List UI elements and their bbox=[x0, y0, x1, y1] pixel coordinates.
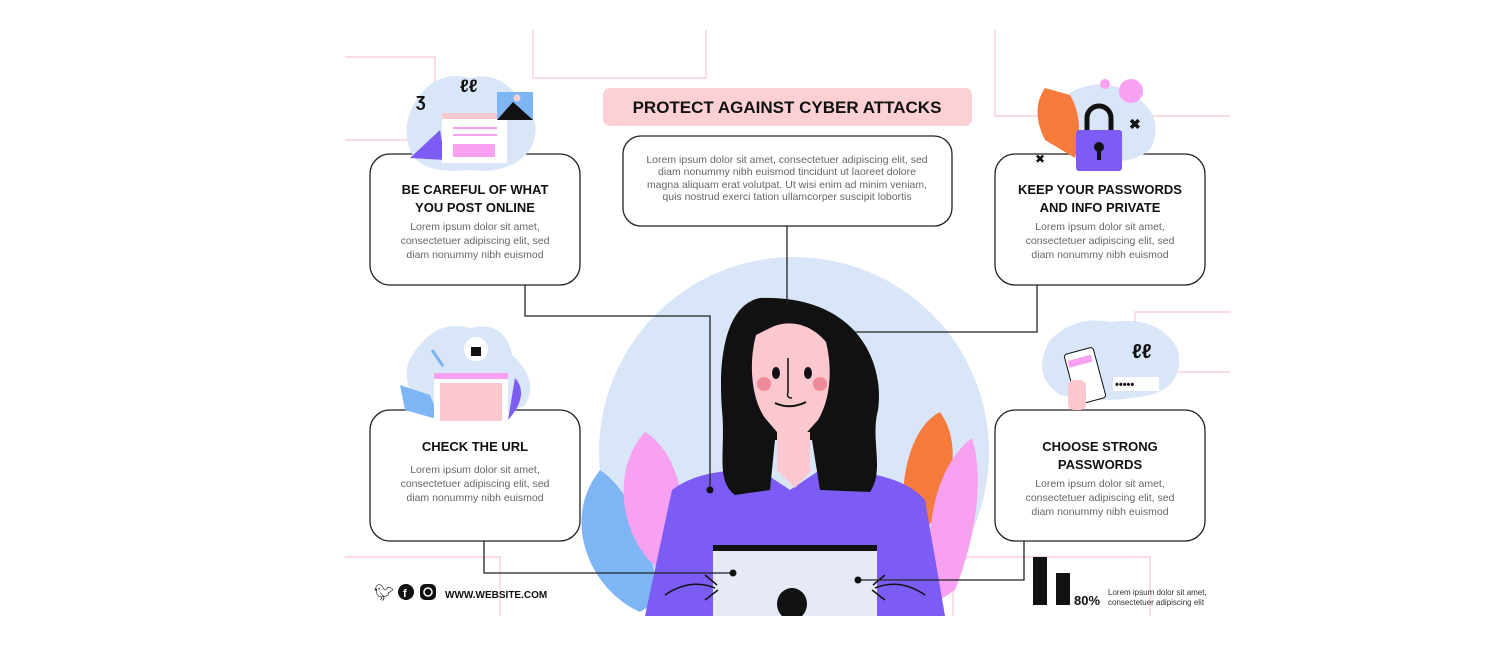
footer social: 🐦︎ bbox=[374, 584, 394, 602]
panel: passwords private: KEEP YOUR PASSWORDS bbox=[1018, 182, 1182, 197]
panel: be careful bbox=[370, 154, 580, 285]
icon: lock: ✖ bbox=[1035, 152, 1045, 166]
footer social bbox=[374, 584, 547, 602]
panel: strong passwords: CHOOSE STRONG bbox=[1042, 439, 1158, 454]
panel: passwords private: consectetuer adipiscing elit, sed bbox=[1026, 235, 1175, 247]
icon: post bbox=[407, 76, 536, 171]
icon: url bbox=[400, 326, 530, 425]
panel: be careful: BE CAREFUL OF WHAT bbox=[402, 182, 548, 197]
woman bbox=[645, 298, 945, 620]
panel: be careful: consectetuer adipiscing elit, sed bbox=[401, 235, 550, 247]
bar chart stat bbox=[1033, 557, 1207, 608]
panel: strong passwords: diam nonummy nibh euismod bbox=[1031, 506, 1169, 518]
panel: passwords private: Lorem ipsum dolor sit amet, bbox=[1035, 221, 1165, 233]
panel: passwords private: AND INFO PRIVATE bbox=[1040, 200, 1161, 215]
central text box: quis nostrud exerci tation ullamcorper suscipit lobortis bbox=[662, 191, 912, 203]
icon: lock: ✖ bbox=[1129, 116, 1141, 132]
panel: be careful: Lorem ipsum dolor sit amet, bbox=[410, 221, 540, 233]
panel: check url: consectetuer adipiscing elit, sed bbox=[401, 478, 550, 490]
central text box bbox=[623, 136, 952, 226]
background circle bbox=[599, 257, 989, 572]
central text box: magna aliquam erat volutpat. Ut wisi enim ad minim veniam, bbox=[647, 179, 927, 191]
connectors bbox=[484, 226, 1037, 580]
title bbox=[603, 88, 972, 126]
bar chart stat: consectetuer adipiscing elit bbox=[1108, 598, 1205, 607]
panel: passwords private bbox=[995, 154, 1205, 285]
icon: phone password bbox=[1042, 320, 1179, 410]
panel: check url bbox=[370, 410, 580, 541]
panel: be careful: diam nonummy nibh euismod bbox=[406, 249, 544, 261]
icon: phone password: ••••• bbox=[1115, 379, 1134, 391]
panel: be careful: YOU POST ONLINE bbox=[415, 200, 535, 215]
panel: check url: diam nonummy nibh euismod bbox=[406, 492, 544, 504]
panel: check url: Lorem ipsum dolor sit amet, bbox=[410, 464, 540, 476]
icon: post: ℓℓ bbox=[460, 76, 478, 96]
footer social: WWW.WEBSITE.COM bbox=[445, 590, 547, 601]
icon: phone password: ℓℓ bbox=[1132, 341, 1152, 363]
bar chart stat: Lorem ipsum dolor sit amet, bbox=[1108, 588, 1207, 597]
central text box: diam nonummy nibh euismod tincidunt ut laoreet dolore bbox=[658, 166, 916, 178]
bar chart stat: 80% bbox=[1074, 593, 1100, 608]
leaves left bbox=[581, 432, 683, 612]
central text box: Lorem ipsum dolor sit amet, consectetuer adipiscing elit, sed bbox=[646, 154, 928, 166]
panel: strong passwords: consectetuer adipiscing elit, sed bbox=[1026, 492, 1175, 504]
panel: strong passwords: PASSWORDS bbox=[1058, 457, 1142, 472]
panel: passwords private: diam nonummy nibh euismod bbox=[1031, 249, 1169, 261]
panel: check url: CHECK THE URL bbox=[422, 439, 528, 454]
footer social: f bbox=[403, 588, 407, 600]
panel: strong passwords bbox=[995, 410, 1205, 541]
icon: post: ʒ bbox=[416, 90, 426, 110]
icon: lock bbox=[1035, 79, 1156, 171]
panel: strong passwords: Lorem ipsum dolor sit amet, bbox=[1035, 478, 1165, 490]
title: PROTECT AGAINST CYBER ATTACKS bbox=[633, 98, 941, 117]
leaves right bbox=[903, 412, 978, 600]
